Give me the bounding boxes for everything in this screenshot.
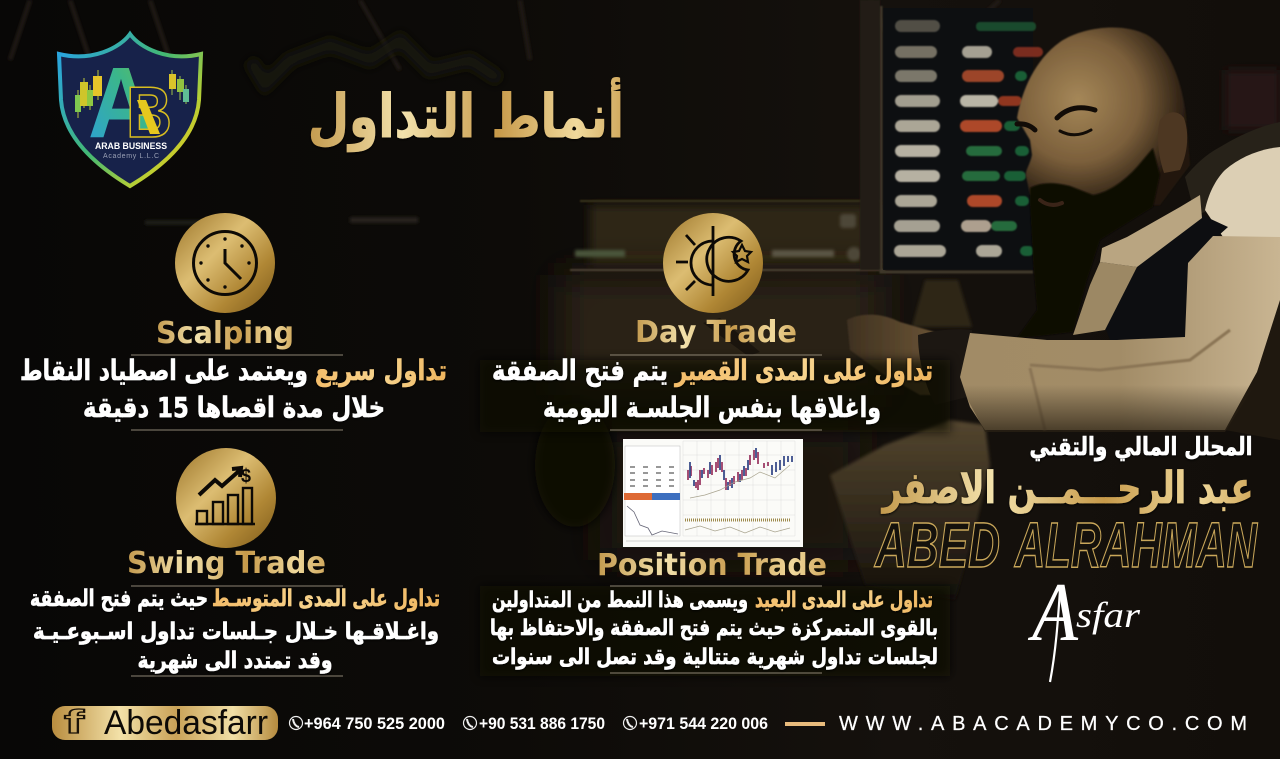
panel: scalping <box>20 213 447 430</box>
description: حيث يتم فتح الصفقة <box>30 586 208 612</box>
logo candles right <box>169 70 189 104</box>
dark text strips <box>480 360 950 676</box>
panel: day trade <box>492 213 933 430</box>
heading: Position Trade <box>597 548 827 583</box>
description: يتم فتح الصفقة <box>492 354 668 387</box>
title: أنماط التداول <box>308 77 624 152</box>
description: تداول على المدى القصير <box>673 354 933 387</box>
description <box>20 354 447 424</box>
description: لجلسات تداول شهرية متتالية وقد تصل الى سنوات <box>492 645 938 670</box>
facebook pill: Abedasfarr <box>104 704 268 742</box>
facebook pill: f <box>64 703 86 740</box>
phone <box>703 318 760 356</box>
dark back right <box>1225 300 1280 440</box>
icon: clock <box>175 213 275 313</box>
accent dash <box>785 722 825 726</box>
shirt collar <box>1100 195 1202 267</box>
description: تداول على المدى البعيد <box>755 588 933 613</box>
description <box>490 588 938 670</box>
description: خلال مدة اقصاها 15 دقيقة <box>83 391 385 424</box>
icon: rising bars with dollar: $ <box>241 466 251 487</box>
footer <box>52 703 1247 742</box>
logo <box>59 34 201 186</box>
icon: rising bars with dollar <box>176 448 276 548</box>
watch band <box>918 329 975 405</box>
description: ويعتمد على اصطياد النقاط <box>20 354 308 387</box>
shirt shadow <box>960 385 1255 432</box>
phone 2: +90 531 886 1750 <box>479 714 605 733</box>
description: بالقوى المتمركزة حيث يتم فتح الصفقة والاحتفاظ بها <box>490 616 938 641</box>
website: WWW.ABACADEMYCO.COM <box>839 713 1247 735</box>
logo monogram: A <box>88 47 154 159</box>
heading: Swing Trade <box>127 546 326 581</box>
description <box>492 354 933 424</box>
dividers <box>131 355 343 430</box>
description: واغلاقها بنفس الجلسـة اليومية <box>543 391 881 424</box>
beard <box>1017 148 1160 338</box>
signature: sfar <box>1076 595 1141 635</box>
phone 1: +964 750 525 2000 <box>304 714 445 733</box>
dividers <box>610 586 822 673</box>
panel: position trade <box>490 439 938 673</box>
signature <box>1028 566 1141 682</box>
vest <box>1105 215 1228 340</box>
heading: Scalping <box>156 316 294 351</box>
logo monogram: B <box>126 73 172 153</box>
trading chart screenshot <box>623 439 803 547</box>
lower torso and other arm <box>830 420 990 600</box>
analyst latin name: ABED <box>874 509 1000 581</box>
heading: Day Trade <box>635 315 797 350</box>
ear <box>1158 112 1187 173</box>
description: ويسمى هذا النمط من المتداولين <box>492 588 748 613</box>
chair <box>1185 122 1280 240</box>
logo candles left <box>75 70 102 118</box>
description: وقد تمتدد الى شهرية <box>138 648 332 674</box>
face details <box>1017 108 1095 205</box>
logo name: ARAB BUSINESS <box>95 141 167 152</box>
signature: A <box>1028 566 1079 659</box>
description <box>30 586 440 674</box>
description: تداول سريع <box>315 354 447 387</box>
logo subtitle: Academy L.L.C <box>103 153 159 160</box>
hand and forearm <box>847 315 945 395</box>
analyst latin name <box>874 509 1258 581</box>
icon: day and night <box>663 213 763 313</box>
description: واغـلاقـها خـلال جـلسات تداول اسـبوعـيـة <box>33 619 439 645</box>
shirt front <box>1073 262 1137 335</box>
man portrait <box>703 27 1280 600</box>
description: تداول على المدى المتوسـط <box>212 586 440 612</box>
dividers <box>131 586 343 676</box>
panel: swing trade <box>30 448 440 676</box>
head <box>1017 27 1190 205</box>
dividers <box>610 355 822 430</box>
background trading table <box>860 0 1043 327</box>
shirt sleeve <box>960 236 1280 430</box>
phone 3: +971 544 220 006 <box>639 714 768 733</box>
